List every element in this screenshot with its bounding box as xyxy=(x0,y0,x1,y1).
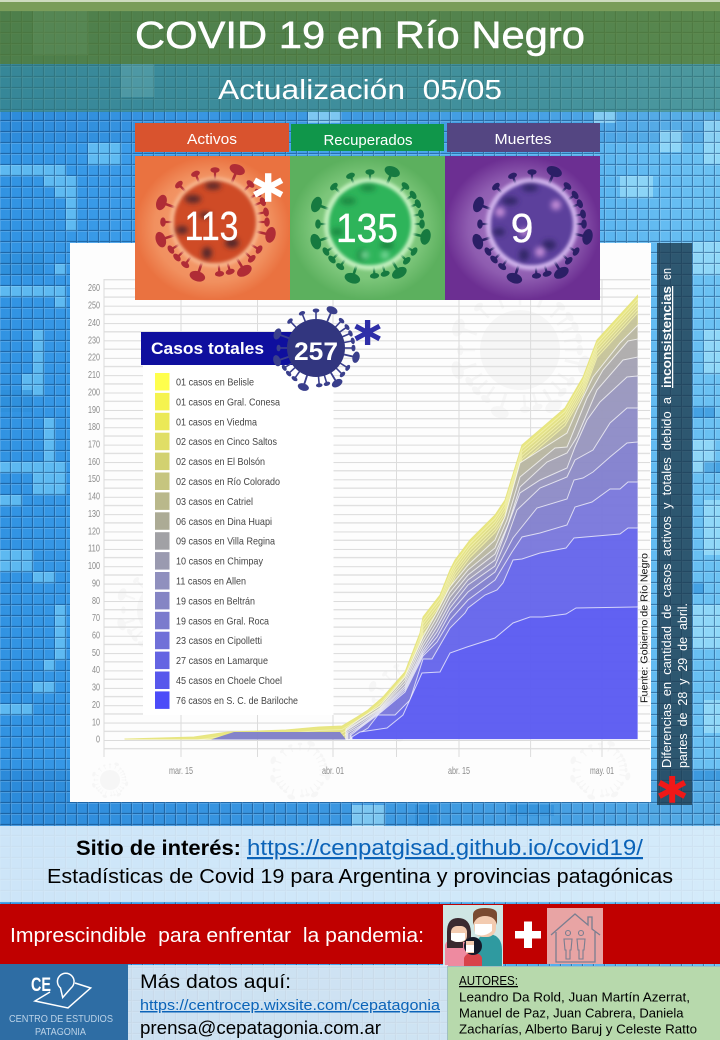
subtitle: update date: Actualización 05/05 xyxy=(218,74,502,105)
chart: stacked area of cases by locality: 110 xyxy=(88,543,100,555)
panel: legend xyxy=(143,365,334,715)
panel: total cases badge: 257 xyxy=(294,338,338,366)
panel: total cases badge xyxy=(141,305,361,392)
white asterisk: * xyxy=(253,163,283,231)
legend labels: 06 casos en Dina Huapi xyxy=(176,516,272,528)
legend labels: 01 casos en Viedma xyxy=(176,416,257,428)
chart: stacked area of cases by locality: 190 xyxy=(88,404,100,416)
panel: more data: https://centrocep.wixsite.com/cepatagonia xyxy=(140,997,441,1014)
chart: stacked area of cases by locality: 40 xyxy=(92,664,100,676)
chart: stacked area of cases by locality: 250 xyxy=(88,300,100,312)
panel: Muertes: 9 xyxy=(511,205,533,251)
chart: stacked area of cases by locality: 100 xyxy=(88,560,100,572)
chart: stacked area of cases by locality: 0 xyxy=(96,734,100,746)
chart: stacked area of cases by locality: abr. 15 xyxy=(448,765,470,777)
panel: inconsistencies note: en xyxy=(660,268,674,280)
panel: Recuperados: 135 xyxy=(336,205,398,251)
title band background xyxy=(0,0,720,112)
icon: purple virus xyxy=(471,164,594,285)
panel: inconsistencies note xyxy=(657,243,692,830)
icon: stay at home xyxy=(547,908,603,964)
chart: stacked area of cases by locality: 90 xyxy=(92,577,100,589)
panel: red banner: Imprescindible para enfrentar la pandemia: xyxy=(10,924,424,947)
legend labels xyxy=(176,376,298,707)
panel: more data: prensa@cepatagonia.com.ar xyxy=(140,1017,381,1038)
source note: Fuente: Gobierno de Río Negro xyxy=(640,553,650,703)
chart: stacked area of cases by locality: 20 xyxy=(92,699,100,711)
panel: inconsistencies note: Diferencias en cantidad de casos activos y totales debido a xyxy=(660,397,674,768)
legend labels: 02 casos en Cinco Saltos xyxy=(176,436,277,448)
panel: Muertes xyxy=(445,123,600,300)
icon: plus xyxy=(515,922,541,948)
legend labels: 02 casos en Río Colorado xyxy=(176,476,280,488)
chart: stacked area of cases by locality: 200 xyxy=(88,386,100,398)
icon: red virus xyxy=(154,162,277,283)
legend labels: 01 casos en Belisle xyxy=(176,376,254,388)
legend labels: 09 casos en Villa Regina xyxy=(176,536,275,548)
red asterisk: * xyxy=(658,767,686,830)
legend labels: 23 casos en Cipolletti xyxy=(176,635,262,647)
panel: logo CEP: PATAGONIA xyxy=(35,1026,86,1038)
panel: authors: Manuel de Paz, Juan Cabrera, Daniela xyxy=(459,1006,684,1020)
panel: Muertes: Muertes xyxy=(494,131,552,148)
chart: stacked area of cases by locality: may. 01 xyxy=(590,765,614,777)
chart: stacked area of cases by locality: 80 xyxy=(92,595,100,607)
panel: Activos: Activos xyxy=(187,131,237,148)
chart: stacked area of cases by locality xyxy=(88,279,650,777)
blue asterisk: * xyxy=(354,312,381,372)
chart: stacked area of cases by locality: 140 xyxy=(88,491,100,503)
panel: Activos xyxy=(135,123,290,300)
panel: authors: AUTORES: xyxy=(459,974,518,988)
legend labels: 76 casos en S. C. de Bariloche xyxy=(176,695,298,707)
legend labels: 03 casos en Catriel xyxy=(176,496,253,508)
chart: stacked area of cases by locality: mar. 15 xyxy=(169,765,193,777)
panel: site of interest: https://cenpatgisad.github.io/covid19/ xyxy=(247,835,644,860)
panel: authors: Zacharías, Alberto Baruj y Celeste Ratto xyxy=(459,1022,697,1036)
panel: red banner xyxy=(0,904,720,966)
chart: stacked area of cases by locality: 150 xyxy=(88,473,100,485)
chart: stacked area of cases by locality: 60 xyxy=(92,630,100,642)
chart: stacked area of cases by locality: abr. 01 xyxy=(322,765,344,777)
chart: stacked area of cases by locality: 210 xyxy=(88,369,100,381)
panel: site of interest: Sitio de interés: xyxy=(76,837,241,860)
title: COVID 19 en Río Negro xyxy=(135,15,585,57)
legend labels: 19 casos en Gral. Roca xyxy=(176,615,269,627)
panel: site of interest xyxy=(0,826,720,902)
panel: inconsistencies note: partes de 28 y 29 de abril. xyxy=(676,603,690,768)
panel: inconsistencies note: inconsistencias xyxy=(660,286,674,388)
chart: stacked area of cases by locality: 180 xyxy=(88,421,100,433)
chart: stacked area of cases by locality: 240 xyxy=(88,317,100,329)
chart: stacked area of cases by locality: 10 xyxy=(92,716,100,728)
icon: map pin xyxy=(35,973,91,1008)
legend swatches xyxy=(155,373,170,709)
panel: site of interest: Estadísticas de Covid 19 para Argentina y provincias patagónicas xyxy=(47,865,673,888)
chart: stacked area of cases by locality: 50 xyxy=(92,647,100,659)
chart: stacked area of cases by locality: 170 xyxy=(88,438,100,450)
legend labels: 11 casos en Allen xyxy=(176,576,246,588)
chart: stacked area of cases by locality: 30 xyxy=(92,682,100,694)
panel: authors xyxy=(448,966,720,1040)
legend labels: 01 casos en Gral. Conesa xyxy=(176,396,280,408)
panel: chart background xyxy=(70,243,651,802)
chart: stacked area of cases by locality: 70 xyxy=(92,612,100,624)
panel: Activos: 113 xyxy=(184,203,238,249)
icon: total cases virus xyxy=(272,305,361,392)
chart: stacked area of cases by locality: 130 xyxy=(88,508,100,520)
panel: Recuperados: Recuperados xyxy=(324,132,412,149)
legend labels: 27 casos en Lamarque xyxy=(176,655,268,667)
panel: logo CEP xyxy=(0,964,128,1040)
chart: stacked area of cases by locality: 120 xyxy=(88,525,100,537)
legend labels: 45 casos en Choele Choel xyxy=(176,675,282,687)
icon: family with masks xyxy=(443,905,503,966)
panel: more data: Más datos aquí: xyxy=(140,972,291,993)
panel: logo CEP: CENTRO DE ESTUDIOS xyxy=(9,1013,113,1025)
chart: stacked area of cases by locality: 260 xyxy=(88,282,100,294)
panel: total cases badge: Casos totales xyxy=(151,340,264,358)
legend labels: 02 casos en El Bolsón xyxy=(176,456,265,468)
panel: more data xyxy=(128,965,448,1040)
icon: green virus xyxy=(309,164,432,285)
panel: Recuperados xyxy=(290,124,445,300)
legend labels: 10 casos en Chimpay xyxy=(176,556,264,568)
chart: stacked area of cases by locality: 160 xyxy=(88,456,100,468)
panel: authors: Leandro Da Rold, Juan Martín Azerrat, xyxy=(459,990,690,1004)
chart: stacked area of cases by locality: 220 xyxy=(88,352,100,364)
legend labels: 19 casos en Beltrán xyxy=(176,595,255,607)
panel: logo CEP: CE xyxy=(31,974,51,996)
chart: stacked area of cases by locality: 230 xyxy=(88,334,100,346)
